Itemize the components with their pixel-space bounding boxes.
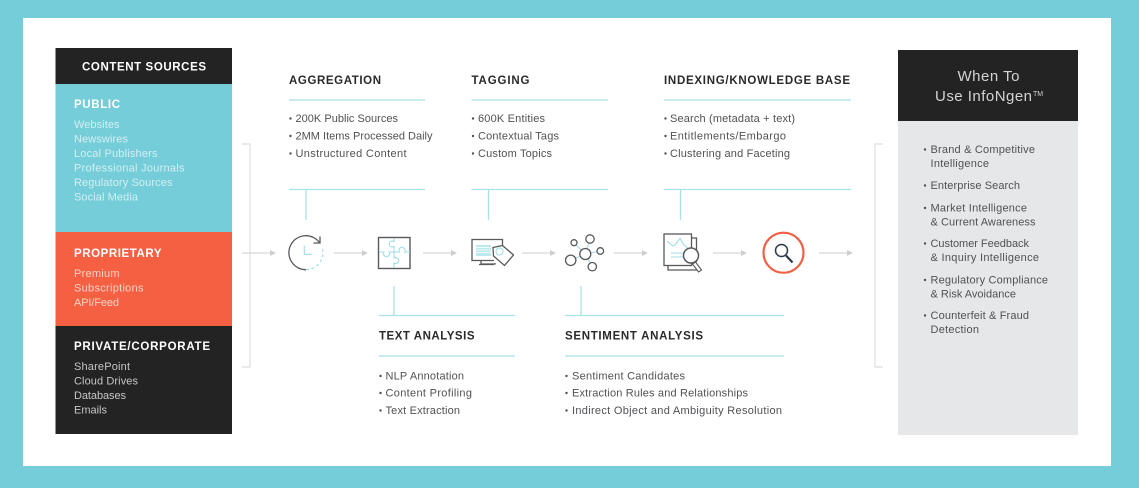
arrow: documents to search bbox=[713, 250, 747, 256]
public sources: Regulatory Sources bbox=[74, 177, 173, 189]
use case list: & Current Awareness bbox=[930, 216, 1036, 228]
sentiment analysis heading: SENTIMENT ANALYSIS bbox=[565, 330, 703, 342]
public sources bbox=[56, 84, 232, 232]
private and corporate sources: SharePoint bbox=[74, 361, 130, 373]
tagging rule bbox=[472, 99, 608, 101]
panel: indexing and knowledge base bbox=[664, 75, 851, 220]
sentiment analysis list: Sentiment Candidates bbox=[572, 370, 686, 382]
public sources: Newswires bbox=[74, 134, 128, 146]
text analysis list: Text Extraction bbox=[386, 405, 460, 417]
private and corporate sources: Emails bbox=[74, 404, 108, 416]
tagging list: 600K Entities bbox=[478, 113, 546, 125]
when to use heading: Use InfoNgen bbox=[935, 88, 1032, 105]
indexing list: Clustering and Faceting bbox=[670, 148, 790, 160]
icon: entity network bbox=[566, 235, 604, 271]
use case list: Market Intelligence bbox=[930, 202, 1027, 214]
when to use heading bbox=[898, 50, 1078, 121]
tagging list: Custom Topics bbox=[478, 148, 552, 160]
arrow: puzzle to tagging bbox=[423, 250, 457, 256]
aggregation list: 200K Public Sources bbox=[296, 113, 398, 125]
use case list: Intelligence bbox=[930, 158, 989, 170]
tagging list: Contextual Tags bbox=[478, 130, 560, 142]
icon: search badge bbox=[764, 233, 804, 273]
icon: puzzle bbox=[378, 238, 410, 268]
use case list: Counterfeit & Fraud bbox=[930, 310, 1029, 322]
when to use heading: When To bbox=[958, 68, 1020, 85]
when to use heading: TM bbox=[1033, 91, 1043, 98]
tagging heading: TAGGING bbox=[472, 75, 530, 87]
public sources: Social Media bbox=[74, 192, 139, 204]
left bracket bbox=[242, 144, 250, 367]
arrow: aggregation to puzzle bbox=[334, 250, 368, 256]
use case list: Detection bbox=[930, 324, 979, 336]
icon: monitor with tag bbox=[472, 240, 514, 266]
arrow: sources to aggregation bbox=[242, 250, 276, 256]
arrow: network to documents bbox=[614, 250, 648, 256]
use case list: & Risk Avoidance bbox=[930, 288, 1016, 300]
use case list: Brand & Competitive bbox=[930, 144, 1035, 156]
private and corporate sources: PRIVATE/CORPORATE bbox=[74, 341, 210, 353]
proprietary sources: Premium bbox=[74, 268, 120, 280]
use case list: Customer Feedback bbox=[930, 238, 1030, 250]
panel: when to use InfoNgen bbox=[898, 50, 1078, 435]
text analysis heading: TEXT ANALYSIS bbox=[379, 330, 475, 342]
private and corporate sources: Cloud Drives bbox=[74, 376, 138, 388]
indexing list bbox=[664, 113, 795, 160]
icon: documents with magnifier bbox=[664, 234, 702, 272]
private and corporate sources: Databases bbox=[74, 390, 126, 402]
aggregation rule bbox=[289, 99, 425, 101]
icon: clock bbox=[289, 236, 323, 270]
tagging connector bbox=[472, 190, 608, 220]
sentiment analysis rule bbox=[565, 355, 784, 357]
arrow: tagging to network bbox=[522, 250, 556, 256]
sentiment analysis list bbox=[565, 370, 782, 417]
aggregation heading: AGGREGATION bbox=[289, 75, 381, 87]
public sources: Websites bbox=[74, 119, 120, 131]
indexing connector bbox=[664, 190, 851, 220]
arrow: search to use cases bbox=[819, 250, 853, 256]
aggregation list: 2MM Items Processed Daily bbox=[296, 130, 433, 142]
tagging list bbox=[472, 113, 560, 160]
indexing list: Entitlements/Embargo bbox=[670, 130, 786, 142]
aggregation list: Unstructured Content bbox=[296, 148, 406, 160]
text analysis list: NLP Annotation bbox=[386, 370, 464, 382]
sentiment analysis list: Extraction Rules and Relationships bbox=[572, 388, 748, 400]
use case list: Regulatory Compliance bbox=[930, 274, 1048, 286]
text analysis list bbox=[379, 370, 472, 417]
proprietary sources: Subscriptions bbox=[74, 282, 144, 294]
panel: sentiment analysis bbox=[565, 286, 784, 417]
right bracket bbox=[875, 144, 883, 367]
panel: text analysis bbox=[379, 286, 515, 417]
public sources: Local Publishers bbox=[74, 148, 158, 160]
content sources heading: CONTENT SOURCES bbox=[82, 62, 206, 74]
private and corporate sources bbox=[56, 326, 232, 434]
panel: aggregation bbox=[289, 75, 433, 220]
proprietary sources bbox=[56, 232, 232, 326]
indexing heading: INDEXING/KNOWLEDGE BASE bbox=[664, 75, 850, 87]
panel: content sources bbox=[56, 48, 232, 434]
use case list: Enterprise Search bbox=[930, 180, 1020, 192]
use case list: & Inquiry Intelligence bbox=[930, 252, 1039, 264]
proprietary sources: PROPRIETARY bbox=[74, 248, 162, 260]
text analysis list: Content Profiling bbox=[386, 388, 472, 400]
public sources: Professional Journals bbox=[74, 162, 185, 174]
text analysis rule bbox=[379, 355, 515, 357]
aggregation connector bbox=[289, 190, 425, 220]
proprietary sources: API/Feed bbox=[74, 297, 119, 309]
text analysis connector bbox=[379, 286, 515, 316]
use case list bbox=[898, 121, 1078, 435]
aggregation list bbox=[289, 113, 433, 160]
indexing list: Search (metadata + text) bbox=[670, 113, 795, 125]
sentiment analysis list: Indirect Object and Ambiguity Resolution bbox=[572, 405, 782, 417]
public sources: PUBLIC bbox=[74, 99, 120, 111]
content sources heading bbox=[56, 48, 232, 84]
indexing rule bbox=[664, 99, 851, 101]
sentiment analysis connector bbox=[565, 286, 784, 316]
panel: tagging bbox=[472, 75, 608, 220]
